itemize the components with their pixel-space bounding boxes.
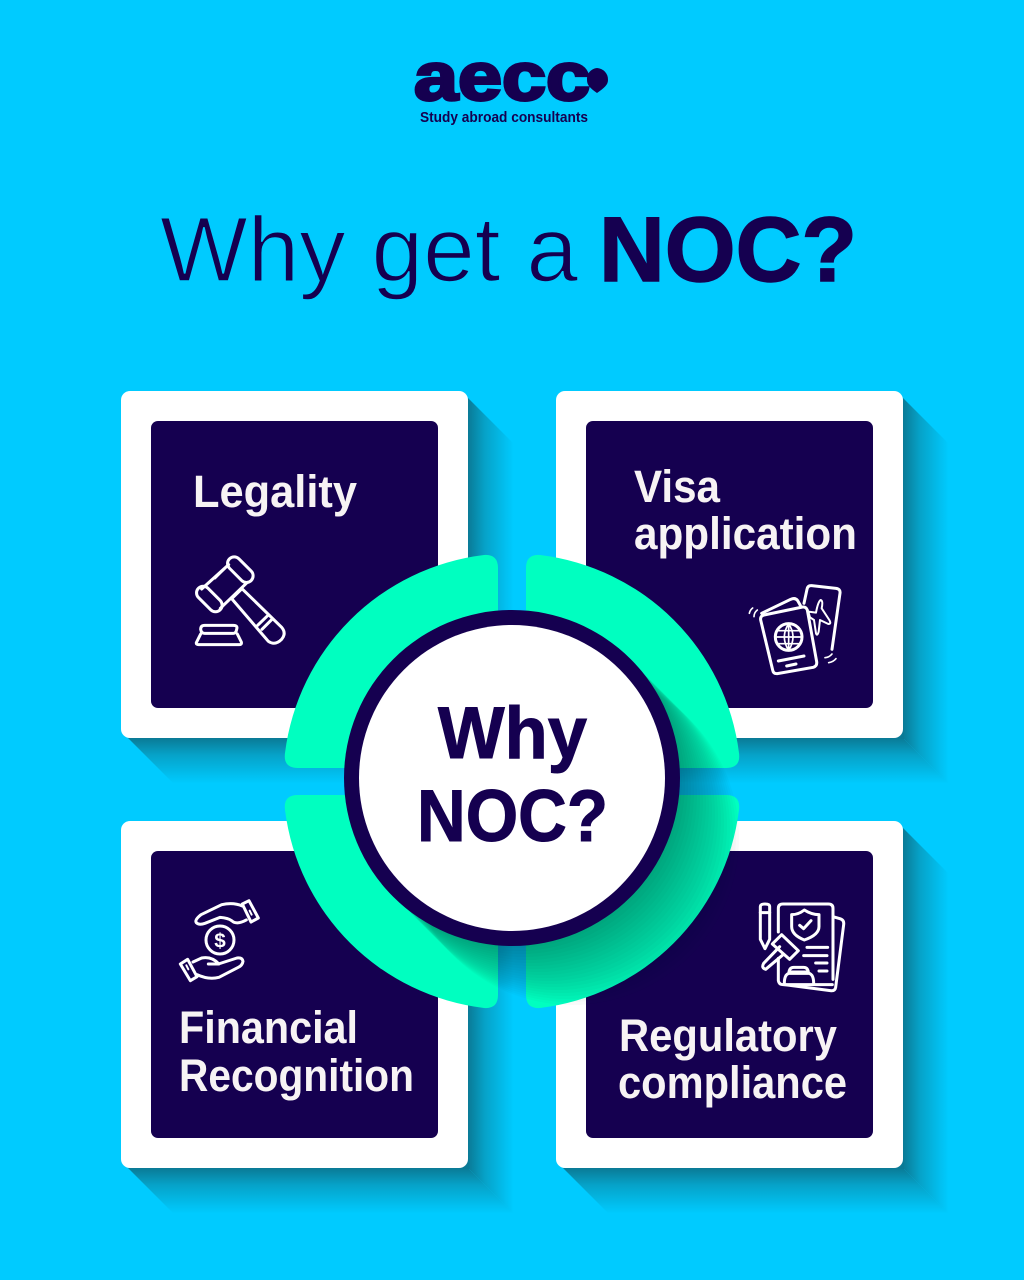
card frame (556, 391, 903, 738)
card inner (151, 421, 438, 708)
badge text (417, 693, 608, 857)
center circle shadow (348, 614, 739, 1005)
card heading: Visa (634, 461, 721, 512)
title light part: Why get a (160, 199, 579, 301)
card shadow (563, 828, 951, 1216)
icon: passport and ticket (749, 586, 840, 674)
panel: regulatory compliance (556, 821, 951, 1216)
title bold part: NOC? (599, 199, 857, 301)
panel: financial recognition (121, 821, 516, 1216)
logo wordmark: aecc (414, 39, 590, 115)
panel: visa application (556, 391, 951, 786)
card heading: application (634, 508, 857, 559)
card heading (179, 1002, 414, 1101)
card heading: Legality (193, 466, 357, 517)
card frame (121, 391, 468, 738)
badge white disc (359, 625, 665, 931)
card shadow (128, 828, 516, 1216)
ring segment: bottom left (285, 795, 498, 1008)
badge outer ring (344, 610, 680, 946)
ring segment: bottom right (526, 795, 739, 1008)
badge text: Why (438, 693, 587, 774)
card heading (618, 1010, 847, 1108)
icon: document, shield, gavel, pencil (760, 904, 844, 991)
card heading: compliance (618, 1057, 847, 1108)
icon: gavel (194, 554, 284, 645)
card inner (151, 851, 438, 1138)
center badge (344, 610, 680, 946)
badge text: NOC? (417, 776, 608, 857)
logo teardrop (587, 68, 608, 93)
card frame (121, 821, 468, 1168)
dollar sign: $ (214, 929, 226, 952)
card inner (586, 851, 873, 1138)
card heading (634, 461, 857, 559)
logo tagline: Study abroad consultants (420, 110, 588, 126)
ring segment: top left (285, 555, 498, 768)
logo (414, 39, 608, 126)
card heading: Recognition (179, 1050, 414, 1101)
card shadow (128, 398, 516, 786)
ring segment: top right (526, 555, 739, 768)
center ring (285, 555, 739, 1008)
title (160, 199, 857, 301)
icon: hands and coin (180, 901, 258, 981)
card frame (556, 821, 903, 1168)
card shadow (563, 398, 951, 786)
card inner (586, 421, 873, 708)
card heading: Regulatory (619, 1010, 837, 1061)
card heading: Financial (179, 1002, 358, 1053)
panel: legality (121, 391, 516, 786)
